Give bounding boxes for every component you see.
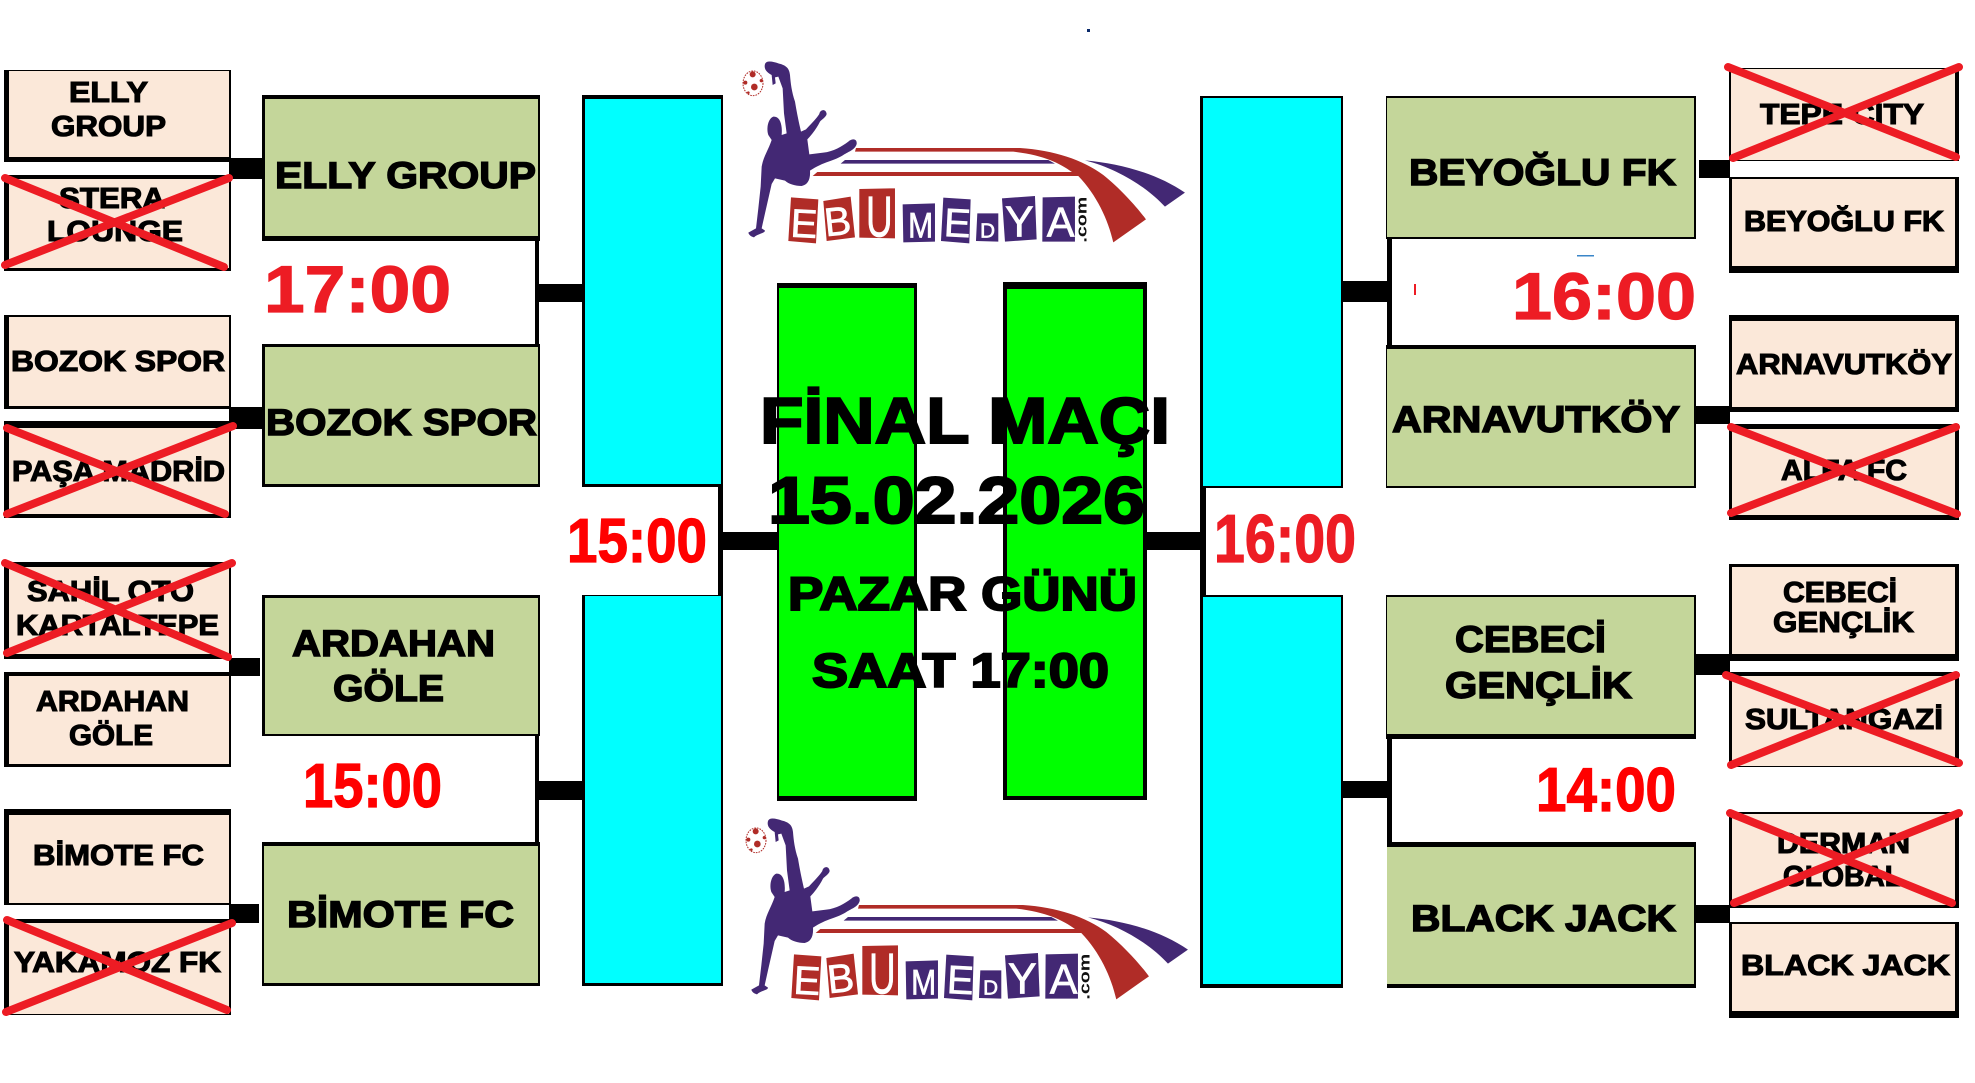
- team: BOZOK SPOR: [4, 315, 231, 409]
- team eliminated: ALFA FC: ALFA FC: [1781, 455, 1907, 487]
- team: ARDAHAN GÖLE: [4, 672, 231, 767]
- stray marks: [1087, 29, 1594, 295]
- quarterfinalist: BOZOK SPOR: BOZOK SPOR: [266, 402, 537, 443]
- ball: [746, 828, 766, 853]
- team eliminated: STERA LOUNGE: LOUNGE: [47, 216, 183, 248]
- team eliminated: SAHİL OTO KARTALTEPE: SAHİL OTO: [27, 576, 194, 608]
- logo: EBU MEDYA top: [743, 62, 1185, 250]
- quarterfinalist: CEBECİ GENÇLİK: GENÇLİK: [1445, 665, 1632, 706]
- team: BLACK JACK: BLACK JACK: [1741, 950, 1950, 982]
- logo letters: D: [980, 219, 995, 242]
- logo letters: M: [908, 206, 933, 245]
- quarterfinalist: BİMOTE FC: BİMOTE FC: [287, 894, 514, 935]
- team eliminated: YAKAMOZ FK: [4, 919, 232, 1015]
- match time: 15:00 semifinal: 15:00: [567, 507, 707, 576]
- team: ELLY GROUP: GROUP: [51, 111, 166, 143]
- quarterfinalist: ELLY GROUP: [262, 95, 540, 241]
- team: BİMOTE FC: BİMOTE FC: [33, 840, 204, 872]
- logo letters: B: [825, 956, 856, 1002]
- team eliminated: PAŞA MADRİD: [4, 421, 233, 518]
- team eliminated: TEPE CITY: [1728, 67, 1959, 161]
- quarterfinalist: BLACK JACK: BLACK JACK: [1411, 898, 1676, 939]
- quarterfinalist: BİMOTE FC: [262, 842, 540, 986]
- semifinal slot: left bottom: [582, 595, 723, 986]
- quarterfinalist: ARDAHAN GÖLE: [262, 595, 540, 736]
- purple stripes: [841, 160, 1185, 207]
- quarterfinalist: ARDAHAN GÖLE: ARDAHAN: [292, 623, 495, 664]
- final match text: 15.02.2026: [768, 463, 1145, 537]
- quarterfinalist: BEYOĞLU FK: [1386, 96, 1696, 239]
- team eliminated: DERMAN GLOBAL: DERMAN: [1777, 828, 1910, 860]
- team eliminated: ALFA FC: [1729, 424, 1959, 520]
- semifinal slot: left top: [582, 95, 723, 487]
- team eliminated: SULTANGAZİ: [1726, 672, 1959, 767]
- player silhouette: [748, 62, 857, 237]
- quarterfinalist: ELLY GROUP: ELLY GROUP: [275, 155, 536, 196]
- connectors: right first round: [1695, 160, 1730, 923]
- team: ARNAVUTKÖY: ARNAVUTKÖY: [1736, 348, 1952, 381]
- match time: 16:00 semifinal: 16:00: [1214, 501, 1356, 577]
- team eliminated: TEPE CITY: TEPE CITY: [1760, 99, 1924, 131]
- team: ARDAHAN GÖLE: GÖLE: [69, 719, 153, 752]
- match time: 15:00 lower left: 15:00: [303, 752, 442, 821]
- red swoosh: [813, 148, 1146, 242]
- team eliminated: PAŞA MADRİD: PAŞA MADRİD: [12, 456, 225, 488]
- quarterfinalist: BEYOĞLU FK: BEYOĞLU FK: [1409, 152, 1676, 193]
- logo letters: A: [1047, 199, 1075, 246]
- quarterfinalist: BLACK JACK: [1387, 842, 1696, 988]
- quarterfinalist: ARNAVUTKÖY: ARNAVUTKÖY: [1392, 399, 1680, 440]
- team eliminated: SAHİL OTO KARTALTEPE: [4, 562, 232, 659]
- team: CEBECİ GENÇLİK: [1729, 564, 1959, 661]
- logo letters: .com: [1078, 954, 1094, 1000]
- logo letters: U: [866, 186, 893, 250]
- team: BEYOĞLU FK: [1729, 177, 1959, 273]
- final slot: right: [1003, 282, 1147, 800]
- final match text: SAAT 17:00: [812, 645, 1109, 698]
- final match text: PAZAR GÜNÜ: [788, 567, 1137, 620]
- team: ELLY GROUP: [4, 70, 231, 162]
- team: BİMOTE FC: [4, 809, 231, 905]
- team: BEYOĞLU FK: BEYOĞLU FK: [1744, 204, 1944, 238]
- semifinal slot: right top: [1200, 96, 1343, 488]
- logo letters: B: [822, 199, 853, 245]
- logo letters: E: [793, 959, 821, 1004]
- red swoosh: [816, 905, 1149, 999]
- logo letters: [791, 943, 1094, 1007]
- quarterfinalist: ARNAVUTKÖY: [1386, 345, 1696, 488]
- connector: right semifinal to final: [1145, 488, 1206, 595]
- team: ELLY GROUP: ELLY: [69, 77, 148, 109]
- logo letters: D: [983, 976, 998, 999]
- quarterfinalist: BOZOK SPOR: [262, 344, 540, 487]
- connectors: left first round: [229, 158, 264, 923]
- connectors: right second round: [1343, 239, 1392, 842]
- logo letters: A: [1050, 956, 1078, 1003]
- quarterfinalist: CEBECİ GENÇLİK: [1386, 595, 1696, 739]
- logo: EBU MEDYA bottom: [746, 819, 1188, 1007]
- logo letters: M: [911, 963, 936, 1002]
- team: CEBECİ GENÇLİK: CEBECİ: [1783, 577, 1897, 609]
- team: BLACK JACK: [1729, 922, 1959, 1018]
- match time: 17:00: 17:00: [264, 252, 451, 326]
- player silhouette: [751, 819, 860, 994]
- logo letters: [788, 186, 1091, 250]
- team eliminated: DERMAN GLOBAL: [1729, 812, 1959, 908]
- match time: 16:00 upper right: 16:00: [1512, 259, 1696, 333]
- team eliminated: DERMAN GLOBAL: GLOBAL: [1783, 861, 1902, 893]
- logo letters: Y: [1005, 199, 1034, 247]
- team: CEBECİ GENÇLİK: GENÇLİK: [1773, 607, 1914, 639]
- team: ARDAHAN GÖLE: ARDAHAN: [36, 686, 189, 718]
- team eliminated: STERA LOUNGE: STERA: [59, 183, 165, 215]
- semifinal slot: right bottom: [1200, 595, 1343, 988]
- quarterfinalist: ARDAHAN GÖLE: GÖLE: [333, 668, 444, 709]
- team eliminated: YAKAMOZ FK: YAKAMOZ FK: [14, 947, 221, 979]
- team: BOZOK SPOR: BOZOK SPOR: [11, 346, 225, 378]
- final slot: left: [777, 283, 917, 801]
- logo letters: E: [790, 202, 818, 247]
- logo letters: E: [946, 958, 975, 1003]
- purple stripes: [844, 917, 1188, 964]
- team: ARNAVUTKÖY: [1729, 315, 1959, 412]
- logo letters: U: [869, 943, 896, 1007]
- team eliminated: STERA LOUNGE: [4, 175, 231, 271]
- quarterfinalist: CEBECİ GENÇLİK: CEBECİ: [1455, 619, 1606, 660]
- ball: [743, 71, 763, 96]
- match time: 14:00: 14:00: [1536, 756, 1676, 825]
- team eliminated: SAHİL OTO KARTALTEPE: KARTALTEPE: [16, 610, 219, 642]
- connectors: left second round: [535, 241, 584, 842]
- team eliminated: SULTANGAZİ: SULTANGAZİ: [1745, 704, 1943, 736]
- connector: left semifinal to final: [718, 487, 781, 595]
- logo letters: .com: [1075, 197, 1091, 243]
- logo letters: E: [943, 201, 972, 246]
- final match text: [760, 384, 1170, 698]
- final match text: FİNAL MAÇI: [760, 384, 1170, 457]
- logo letters: Y: [1008, 956, 1037, 1004]
